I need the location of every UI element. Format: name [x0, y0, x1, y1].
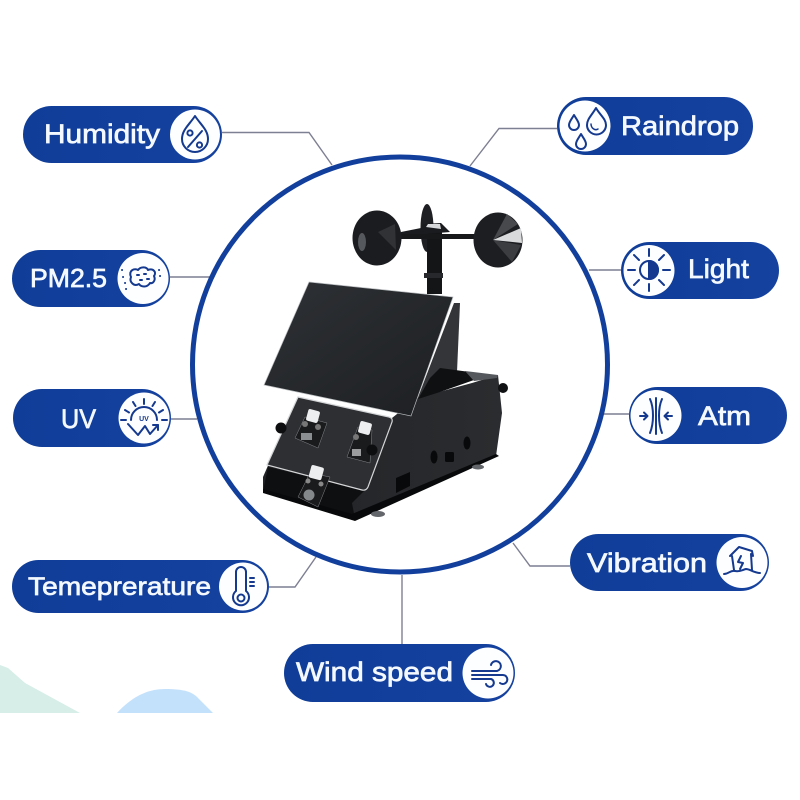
- badge: Raindrop: [557, 97, 753, 155]
- badge: Raindrop: Raindrop: [621, 111, 739, 141]
- badge: Humidity: [23, 106, 222, 163]
- badge: Atm: [629, 387, 787, 444]
- badge: Light: Light: [688, 254, 750, 284]
- badge: Vibration: Vibration: [587, 548, 707, 578]
- badge: UV: UV: [61, 404, 96, 434]
- knobs: [276, 422, 286, 434]
- badge: PM2.5: PM2.5: [30, 263, 107, 293]
- badge: Light: [621, 242, 779, 299]
- badge: Temeprerature: [12, 560, 269, 613]
- badge: Atm: Atm: [698, 401, 751, 431]
- rear support: [417, 303, 460, 400]
- base plate: [263, 454, 499, 521]
- badge: Wind speed: Wind speed: [296, 657, 453, 687]
- clear cover: [267, 397, 392, 490]
- badge: Temeprerature: Temeprerature: [28, 573, 211, 601]
- lower front opening: [263, 467, 365, 519]
- icon: shaken house: [724, 547, 760, 574]
- sensor boards: [295, 409, 372, 507]
- solar panel: [264, 282, 453, 416]
- main body: [263, 375, 502, 520]
- icon: thermometer: [233, 567, 254, 605]
- badge: PM2.5: [12, 250, 170, 307]
- badge: Wind speed: [284, 644, 515, 702]
- right knob: [498, 383, 508, 393]
- badge: Vibration: [570, 534, 769, 591]
- side ports: [430, 450, 438, 464]
- icon: UV sun: UV: [139, 416, 149, 423]
- icon: UV sun: [121, 399, 167, 435]
- connector lines: [170, 128, 629, 644]
- anemometer: [352, 204, 522, 294]
- mechanism behind panel: [418, 368, 474, 399]
- icon: percent drop: [182, 116, 208, 152]
- icon: pressure: [640, 398, 672, 434]
- product: weather station: [263, 204, 522, 521]
- badge: UV: [13, 389, 171, 447]
- central circle frame: [192, 157, 608, 572]
- decorative background hills: [0, 665, 213, 713]
- badge: Humidity: Humidity: [44, 119, 161, 149]
- icon: half sun: [628, 249, 670, 291]
- icon: dust cloud: [122, 267, 160, 289]
- icon: raindrops: [569, 108, 606, 149]
- icon: wind: [472, 661, 507, 687]
